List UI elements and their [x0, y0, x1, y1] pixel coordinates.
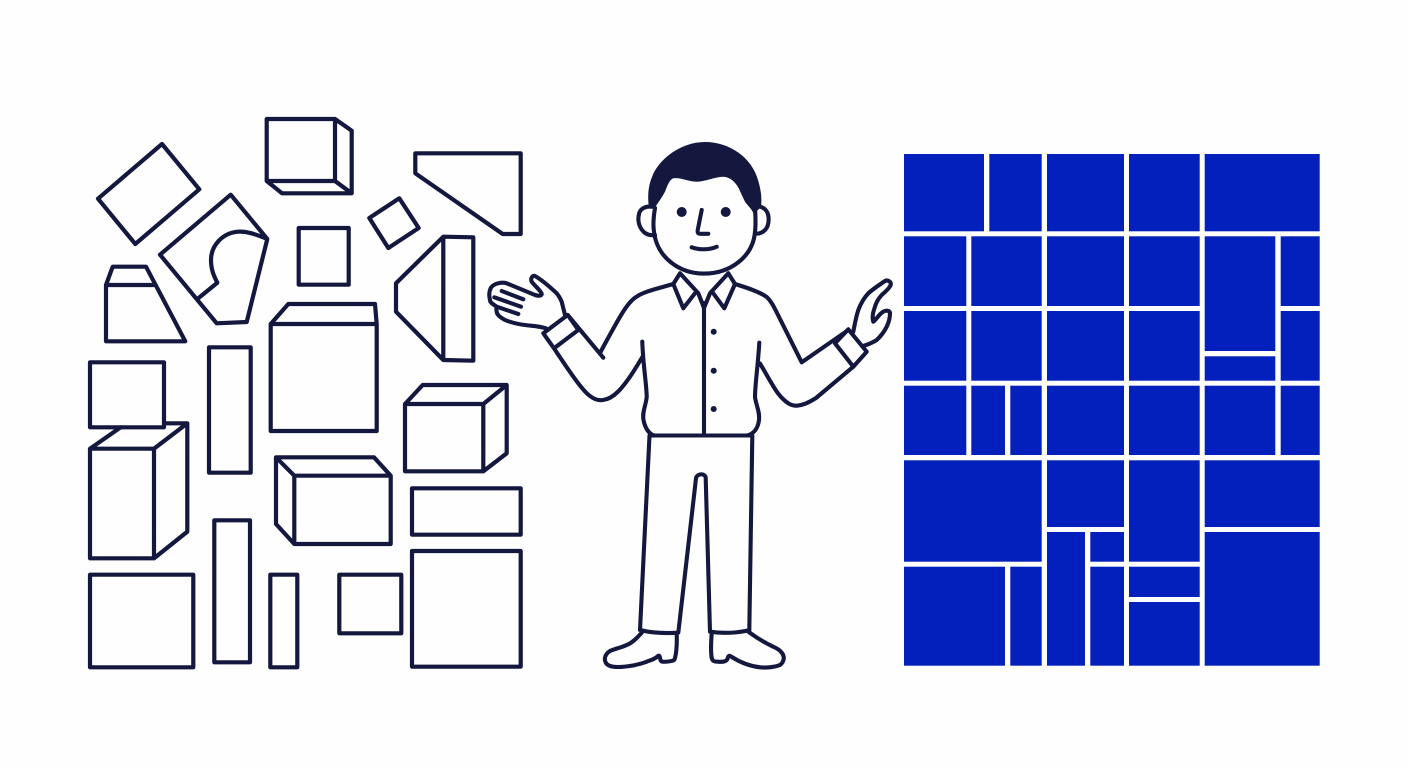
eye: right: [721, 207, 731, 217]
shape: stacked rectangle: [90, 362, 164, 427]
shape: tall cuboid: [90, 423, 187, 558]
shape: large open box: [271, 304, 377, 431]
button: middle: [711, 368, 717, 374]
shape: wide rectangle: [412, 488, 521, 535]
shape: small square: [299, 228, 349, 285]
shape: small diamond: [369, 198, 419, 248]
shape: bottom left rectangle: [90, 575, 193, 667]
shape: trapezoid: [106, 267, 185, 341]
shoe: left: [605, 633, 677, 667]
hair: [648, 142, 761, 214]
row 1 tiles: [904, 154, 1320, 231]
hand: right: [853, 281, 891, 346]
button: top: [711, 329, 717, 335]
lower tiles: [904, 460, 1320, 666]
shirt right side and arm: [735, 284, 853, 436]
shape: large square: [412, 551, 521, 667]
row 4 tiles: [904, 386, 1320, 455]
face: [653, 208, 756, 274]
shirt placket: [702, 303, 706, 435]
eye: left: [677, 207, 687, 217]
shirt left side and arm: [554, 284, 673, 436]
shape: prism: [396, 237, 473, 361]
panel: blue tiled grid: [904, 154, 1320, 666]
row 2 tiles: [904, 236, 1320, 351]
panel: scattered outline shapes: [90, 119, 521, 667]
shape: middle cuboid: [276, 457, 391, 544]
button: bottom: [711, 406, 717, 412]
shape: cut corner panel: [415, 153, 521, 234]
cuff: right: [835, 329, 867, 367]
collar: [673, 273, 735, 308]
shirt hem: [650, 433, 750, 438]
ear: left: [638, 207, 655, 235]
shape: notched pentagon: [160, 195, 267, 323]
ear: right: [755, 207, 769, 234]
shape: narrow rectangle: [270, 575, 297, 667]
shape: top cube: [267, 119, 352, 193]
hand: left: [489, 276, 565, 328]
shoe: right: [711, 632, 784, 668]
figure: man presenting: [489, 142, 891, 668]
shape: tilted rectangle: [98, 144, 199, 244]
trousers: [640, 436, 752, 633]
row 3 tiles: [904, 311, 1320, 381]
shape: bottom small rectangle: [339, 575, 401, 633]
shape: right cuboid: [405, 385, 507, 471]
cuff: left: [543, 315, 578, 348]
shape: tall rectangle lower: [214, 520, 250, 662]
shape: tall rectangle upper: [209, 347, 251, 473]
mouth: [692, 247, 717, 249]
nose: [698, 210, 708, 234]
